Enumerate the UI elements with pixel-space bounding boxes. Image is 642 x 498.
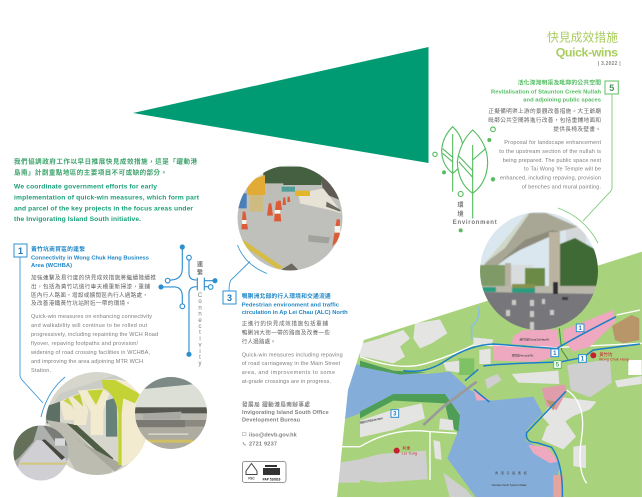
icon label: Connectivity vertical <box>197 260 203 367</box>
section 5 English body: Proposal for landscape enhancement <box>504 140 601 146</box>
contact block: Invigorating Island South Office: 發展局 躍動港島南辦事處 <box>242 400 310 408</box>
map pink zones <box>473 310 616 498</box>
map road labels: 香葉道 Heung Yip Rd <box>512 353 534 358</box>
map MTR station: Lei Tung: Lei Tung <box>402 451 417 455</box>
map brown zone <box>612 315 639 343</box>
heading: Quick-wins: 快見成效措施 <box>547 30 618 44</box>
section 1 English body: Quick-win measures on enhancing connectivity <box>31 314 152 320</box>
green triangle <box>133 47 428 163</box>
section 5 English body: of benches and mural painting. <box>522 185 601 191</box>
contact block: Invigorating Island South Office: Invigorating Island South Office <box>242 410 329 416</box>
map shoreline parks <box>360 358 474 432</box>
section 1 Chinese body: 出，包括為黃竹坑道行車天橋重新掃漆，重鋪 <box>31 282 150 290</box>
map roads <box>337 310 642 483</box>
section 3 heading: Pedestrian environment and traffic <box>242 302 340 308</box>
number badge 1 <box>14 244 27 257</box>
section 3 English body: at-grade crossings are in progress. <box>242 379 331 385</box>
section 5 heading <box>491 79 601 103</box>
section 3 English body <box>242 352 343 385</box>
section 1 heading: Connectivity in Wong Chuk Hang Business <box>31 256 149 262</box>
section 5 English body: enhanced, including repaving, provision <box>500 175 601 181</box>
section 5 English body: to the upstream section of the nullah is <box>499 149 601 155</box>
icon label: Connectivity vertical: o <box>198 299 202 305</box>
section 3 heading <box>242 292 348 316</box>
intro text <box>14 156 200 223</box>
icon label: Connectivity vertical: v <box>198 343 202 349</box>
section 3 English body: of road carriageway in the Main Street <box>242 361 340 367</box>
section 5 heading: Revitalisation of Staunton Creek Nullah <box>491 90 601 96</box>
section 1 Chinese body: 加強連繫及易行度的快見成效措施將繼續陸續推 <box>31 273 156 281</box>
number badge 3: 3 <box>227 293 232 303</box>
section 3 English body: Quick-win measures including repaving <box>242 352 343 358</box>
heading: Quick-wins <box>547 30 621 67</box>
intro text: implementation of quick-win measures, which form part <box>14 194 200 201</box>
map marker 1 east <box>579 355 586 363</box>
photo: footpath <box>12 425 70 482</box>
photo: underpass public space <box>478 210 600 332</box>
number badge 1: 1 <box>18 246 23 256</box>
panel: section 3 Ap Lei Chau North <box>223 291 348 385</box>
map MTR station: Wong Chuk Hang: Wong Chuk Hang <box>599 357 629 361</box>
section 3 heading: 鴨脷洲北部的行人環境和交通流通 <box>242 292 331 300</box>
icon label: Connectivity vertical: n <box>198 305 202 311</box>
icon label: Connectivity vertical: e <box>198 318 202 324</box>
section 1 English body: and walkability will continue to be rolled out <box>31 323 147 329</box>
map MTR station: Wong Chuk Hang: 黃竹坑 <box>599 351 613 358</box>
map road labels <box>359 337 550 487</box>
icon label: Connectivity vertical: y <box>198 361 202 367</box>
section 5 English body: being prepared. The public space next <box>503 158 601 164</box>
icon: connectivity circuit <box>159 245 217 356</box>
map road labels: 香港仔避風塘 <box>495 470 527 475</box>
map marker 1 north: 1 <box>578 326 582 332</box>
section 3 English body: area, and improvements to some <box>242 370 335 376</box>
section 1 heading: 黃竹坑商貿區的連繫 <box>31 245 85 253</box>
icon: environment leaves <box>433 127 495 232</box>
section 3 Chinese body <box>242 319 330 345</box>
section 1 English body <box>30 314 158 374</box>
intro text: 我們協調政府工作以早日推展快見成效措施，這是「躍動港 <box>14 156 198 165</box>
icon label: Connectivity vertical: i <box>199 336 201 342</box>
map road labels: 黃竹坑道 Wong Chuk Hang Rd <box>519 337 550 342</box>
contact block: Invigorating Island South Office <box>242 400 329 447</box>
icon label: Environment <box>453 202 497 226</box>
section 1 English body: flyover, repaving footpaths and provision/ <box>31 341 138 347</box>
map marker 5: 5 <box>556 363 560 369</box>
section 5 Chinese body: 提供長椅及壁畫。 <box>553 125 601 133</box>
map stream <box>472 307 479 340</box>
section 3 Chinese body: 行人過路處。 <box>242 337 276 345</box>
map built-up blocks <box>360 319 642 468</box>
map marker 1 north <box>576 324 584 332</box>
email: iiso@devb.gov.hk <box>249 432 298 438</box>
section 3 heading: circulation in Ap Lei Chau (ALC) North <box>242 310 348 316</box>
icon label: Connectivity vertical: C <box>198 293 203 299</box>
section 5 heading: and adjoining public spaces <box>523 97 601 103</box>
map marker 3: 3 <box>393 412 397 418</box>
section 1 heading <box>31 245 149 269</box>
map MTR station: Wong Chuk Hang <box>590 351 629 361</box>
intro text: and parcel of the key projects in the focus areas under <box>14 205 193 212</box>
section 1 English body: Station. <box>31 368 51 374</box>
map marker 1 east: 1 <box>581 357 585 363</box>
panel: section 1 Connectivity in Wong Chuk Hang <box>14 244 158 417</box>
section 5 English body: to Tai Wong Ye Temple will be <box>524 166 601 172</box>
icon label: Connectivity vertical: t <box>199 330 201 336</box>
map marker 1 centre: 1 <box>553 351 557 357</box>
intro text: We coordinate government efforts for early <box>14 183 157 190</box>
number badge 5: 5 <box>609 83 614 93</box>
map of the focus area <box>333 250 642 498</box>
section 1 heading: Area (WCHBA) <box>31 263 72 269</box>
section 5 English body <box>499 140 601 191</box>
intro text: 島南」計劃重點地區的主要項目不可或缺的部分。 <box>14 167 167 176</box>
printing mark: PAP 510816 <box>263 478 281 482</box>
map grey districts <box>335 359 612 498</box>
section 1 Chinese body: 區內行人路面，增設或擴闊區內行人過路處， <box>31 291 148 299</box>
section 1 English body: and improving the area adjoining MTR WCH <box>31 359 143 365</box>
map marker 1 centre <box>551 349 559 357</box>
icon label: Connectivity vertical: 繫 <box>197 268 203 276</box>
map route lines <box>403 317 640 498</box>
intro text: the Invigorating Island South initiative. <box>14 216 141 223</box>
heading: Quick-wins: | 3.2022 | <box>598 61 621 67</box>
icon label: Connectivity vertical: 連 <box>197 260 203 268</box>
section 5 Chinese body: 毗鄰公共空間將進行改善，包括重鋪地面和 <box>488 116 601 124</box>
icon label: Connectivity vertical: n <box>198 312 202 318</box>
number badge 5 <box>605 81 618 94</box>
icon label: Connectivity vertical: i <box>199 349 201 355</box>
logos: FSC and soy ink <box>242 462 286 482</box>
contact block: Invigorating Island South Office: Development Bureau <box>242 418 301 424</box>
FSC tree mark: FSC <box>248 476 255 480</box>
section 1 English body: progressively, including repainting the WCH Road <box>31 332 158 338</box>
icon label: Environment: 境 <box>458 210 464 218</box>
section 5 Chinese body: 正擬備明渠上游的景觀改善措施。大王爺廟 <box>488 107 601 115</box>
callout arc for road works photo <box>229 245 267 291</box>
map marker 3 <box>391 410 399 418</box>
map MTR station: Lei Tung: 利東 <box>402 444 410 450</box>
photo: flyover arches <box>46 372 146 475</box>
map bridge <box>423 382 477 425</box>
connector line to photos <box>20 257 65 417</box>
section 1 Chinese body: 及改善港鐵黃竹坑站附近一帶的環境。 <box>31 299 131 307</box>
map MTR station: Lei Tung <box>394 444 417 455</box>
icon label: Connectivity vertical: c <box>198 324 202 330</box>
heading: Quick-wins: Quick-wins <box>556 46 618 60</box>
map water <box>333 360 560 498</box>
phone: 2721 9237 <box>249 441 277 447</box>
section 1 English body: widening of road crossing facilities in WCHBA, <box>30 350 150 356</box>
map road labels: Aberdeen South Typhoon Shelter <box>492 483 527 487</box>
map marker 5 <box>554 361 561 369</box>
panel: section 5 Staunton Creek Nullah <box>488 79 618 243</box>
section 1 Chinese body <box>31 273 156 307</box>
photo: road works with traffic cones <box>235 165 345 272</box>
icon label: Connectivity vertical: t <box>199 355 201 361</box>
icon label: Environment: 環 <box>458 202 464 209</box>
section 5 Chinese body <box>488 107 601 133</box>
section 5 connector <box>558 94 612 243</box>
photo: road crossing <box>135 377 207 449</box>
icon label: Environment: Environment <box>453 220 497 226</box>
section 3 Chinese body: 鴨脷洲大街一帶的路面及改善一些 <box>242 328 330 336</box>
map road labels: 鴨脷洲大街 Main Street <box>359 415 383 425</box>
section 3 Chinese body: 正進行的快見成效措施包括重鋪 <box>242 319 328 327</box>
map land <box>333 250 642 498</box>
section 5 heading: 活化深灣明渠及毗鄰的公共空間 <box>518 79 601 87</box>
